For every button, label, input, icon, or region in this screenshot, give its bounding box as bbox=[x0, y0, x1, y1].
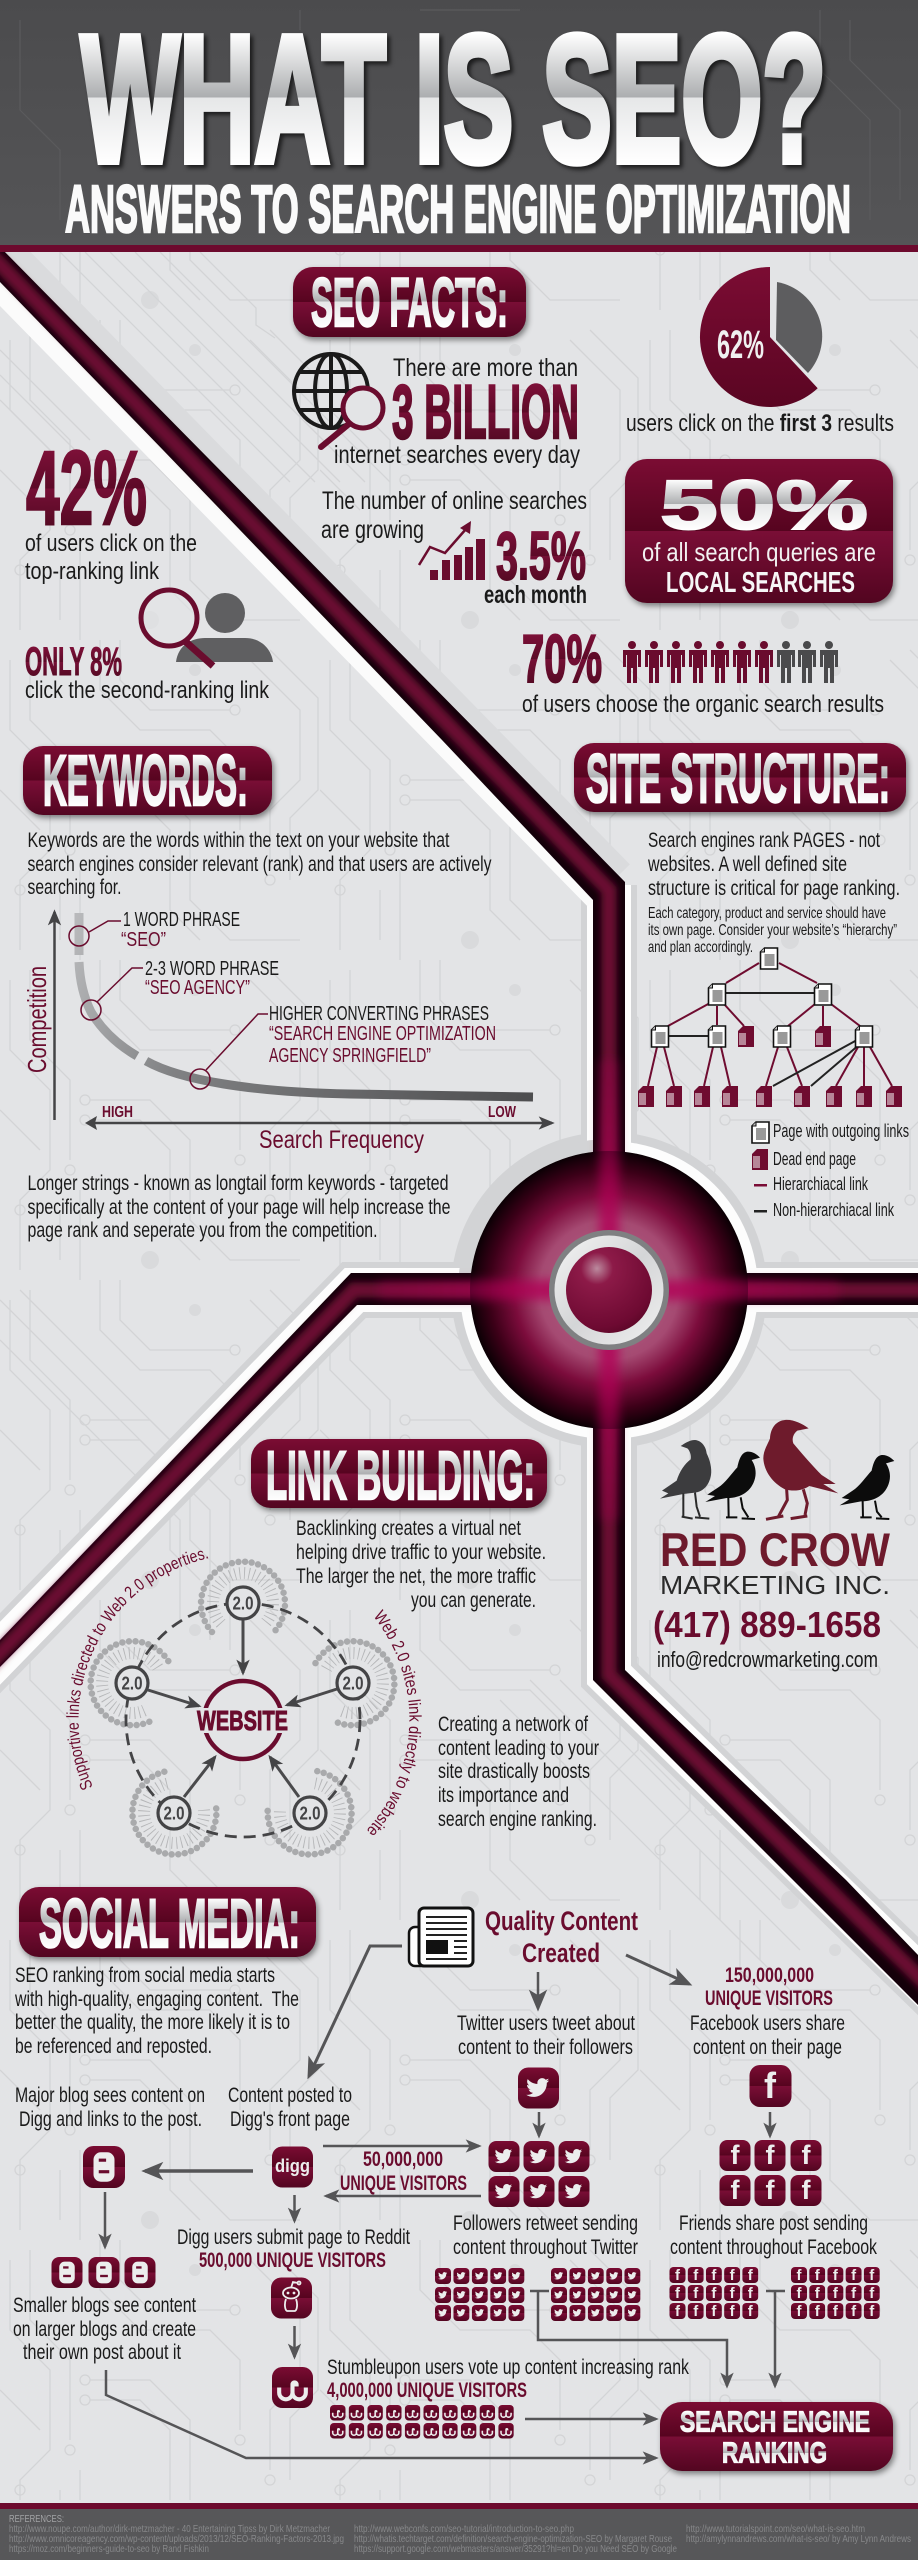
stat: searches growing 3.5%: The number of online searches bbox=[322, 487, 587, 515]
stat: only 8% bbox=[25, 640, 270, 704]
text: site structure intro: and plan accordingly. bbox=[648, 939, 753, 956]
facebook branch text bbox=[690, 1964, 845, 2059]
panel: keywords bbox=[22, 742, 552, 1242]
ribbon shapes bbox=[0, 247, 918, 2005]
stat: only 8%: ONLY 8% bbox=[25, 640, 122, 684]
callout: search engine ranking: RANKING bbox=[722, 2438, 827, 2470]
callout: 50% local searches: of all search queries are bbox=[642, 537, 876, 567]
text: network explanation: its importance and bbox=[438, 1784, 569, 1807]
text: keywords definition: search engines consider relevant (rank) and that users are actively bbox=[28, 853, 492, 876]
facebook branch text: content on their page bbox=[693, 2036, 842, 2059]
icon: facebook large: f bbox=[764, 2065, 777, 2106]
text: major blog: Major blog sees content on bbox=[15, 2084, 205, 2107]
footer: references: http://www.noupe.com/author/dirk-metzmacher - 40 Entertaining Tipss by Dirk Metzmacher bbox=[9, 2523, 330, 2535]
text: keywords definition bbox=[28, 829, 492, 899]
icon: growth bars bbox=[419, 521, 485, 580]
chart: keyword competition curve: “SEARCH ENGINE OPTIMIZATION bbox=[269, 1023, 496, 1045]
chart: keyword competition curve: “SEO AGENCY” bbox=[145, 977, 250, 999]
facebook branch text: 150,000,000 bbox=[725, 1964, 814, 1987]
diagram: web 2.0 link network: 2.0 bbox=[232, 1594, 254, 1614]
stat: 3 billion searches: internet searches every day bbox=[334, 441, 580, 469]
heading: quality content created: Created bbox=[522, 1938, 600, 1968]
text: social intro: SEO ranking from social media starts bbox=[15, 1964, 275, 1987]
panel: social media bbox=[13, 1885, 893, 2471]
chart: keyword competition curve: HIGHER CONVERTING PHRASES bbox=[269, 1003, 489, 1025]
text: major blog: Digg and links to the post. bbox=[19, 2108, 202, 2131]
chart: keyword competition curve bbox=[22, 909, 552, 1154]
panel: site structure bbox=[574, 740, 909, 1220]
text: backlinking: you can generate. bbox=[411, 1589, 536, 1612]
heading: link building: LINK BUILDING: bbox=[266, 1437, 535, 1514]
text: site structure intro: websites. A well defined site bbox=[647, 853, 847, 876]
diagram: web 2.0 link network bbox=[66, 1550, 422, 1858]
chart: keyword competition curve: Competition bbox=[22, 966, 52, 1073]
text: followers retweet bbox=[453, 2212, 638, 2259]
heading: social media: SOCIAL MEDIA: bbox=[39, 1885, 300, 1962]
text: smaller blogs: on larger blogs and create bbox=[13, 2318, 196, 2341]
chart: keyword competition curve: “SEO” bbox=[121, 929, 166, 951]
text: digg to reddit: 500,000 UNIQUE VISITORS bbox=[199, 2249, 386, 2272]
icon: stumbleupon bbox=[272, 2367, 313, 2408]
text: longtail keywords: specifically at the content of your page will help increase the bbox=[28, 1196, 450, 1219]
icon: newspaper bbox=[409, 1908, 473, 1966]
text: backlinking: The larger the net, the more traffic bbox=[296, 1565, 536, 1588]
footer: references: http://whatis.techtarget.com/definition/search-engine-optimization-SEO by Margaret Rouse bbox=[354, 2533, 672, 2545]
icon: digg: digg bbox=[275, 2156, 310, 2176]
icons: twitter grid bbox=[435, 2268, 640, 2321]
icons: stumbleupon grid bbox=[330, 2405, 514, 2438]
stat: 50 million visitors: 50,000,000 bbox=[363, 2148, 443, 2171]
icons: facebook six: fff bbox=[730, 2175, 812, 2205]
diagram: web 2.0 link network: WEBSITE bbox=[197, 1705, 288, 1736]
facebook branch text: UNIQUE VISITORS bbox=[705, 1987, 833, 2010]
heading: link building bbox=[251, 1437, 547, 1514]
text: smaller blogs bbox=[13, 2294, 196, 2364]
stat: 3 billion searches bbox=[334, 354, 580, 469]
stat: searches growing 3.5%: are growing bbox=[321, 516, 424, 544]
header band bbox=[0, 0, 918, 252]
panel: SEO facts bbox=[25, 264, 894, 718]
label: web 2.0 sites: Web 2.0 sites link directly to website bbox=[368, 1609, 422, 1835]
text: digg to reddit: Digg users submit page to Reddit bbox=[177, 2226, 410, 2249]
diagram: page hierarchy tree bbox=[638, 948, 902, 1107]
stat: 42% top link: 42% bbox=[26, 430, 147, 547]
stat: 3 billion searches: 3 BILLION bbox=[392, 370, 579, 455]
text: stumbleupon: Stumbleupon users vote up content increasing rank bbox=[327, 2356, 689, 2379]
heading: keywords: KEYWORDS: bbox=[43, 742, 248, 821]
diagram: web 2.0 link network: 2.0 bbox=[122, 1674, 142, 1694]
text: friends share bbox=[670, 2212, 877, 2259]
phone number: (417) 889-1658 bbox=[653, 1604, 881, 1645]
heading: SEO facts: SEO FACTS: bbox=[311, 264, 508, 341]
text: digg front page bbox=[228, 2084, 352, 2131]
chart: keyword competition curve: Search Frequency bbox=[259, 1126, 424, 1154]
text: smaller blogs: Smaller blogs see content bbox=[13, 2294, 196, 2317]
text: stumbleupon: 4,000,000 UNIQUE VISITORS bbox=[327, 2379, 527, 2402]
text: network explanation: site drastically boosts bbox=[438, 1760, 590, 1783]
footer: references: https://moz.com/beginners-guide-to-seo by Rand Fishkin bbox=[9, 2543, 209, 2555]
icon: facebook large bbox=[750, 2065, 792, 2107]
text: followers retweet: content throughout Twitter bbox=[453, 2236, 638, 2259]
text: digg to reddit bbox=[177, 2226, 410, 2272]
twitter branch text: content to their followers bbox=[458, 2036, 633, 2059]
icons: twitter six bbox=[488, 2141, 590, 2207]
stat: 70% organic bbox=[522, 621, 884, 718]
chart: keyword competition curve: 1 WORD PHRASE bbox=[123, 909, 240, 931]
text: major blog bbox=[15, 2084, 205, 2131]
heading: SEO facts bbox=[293, 264, 526, 341]
icon: blogger bbox=[83, 2146, 125, 2188]
text: social intro bbox=[14, 1964, 299, 2058]
footer: references: http://www.webconfs.com/seo-tutorial/introduction-to-seo.php bbox=[354, 2523, 574, 2535]
diagram: web 2.0 link network: 2.0 bbox=[164, 1804, 184, 1824]
chart: keyword competition curve: LOW bbox=[488, 1104, 517, 1121]
text: keywords definition: Keywords are the words within the text on your website that bbox=[28, 829, 450, 852]
heading: quality content created: Quality Content bbox=[485, 1906, 638, 1936]
pie chart 62%: 62% bbox=[717, 323, 764, 367]
heading: keywords bbox=[23, 742, 272, 821]
icons: facebook grid: ffffffffff bbox=[675, 2267, 875, 2284]
text: backlinking: Backlinking creates a virtual net bbox=[296, 1517, 521, 1540]
chart: keyword competition curve: 2-3 WORD PHRASE bbox=[145, 958, 279, 980]
chart: keyword competition curve: AGENCY SPRINGFIELD” bbox=[269, 1045, 431, 1067]
icon: digg bbox=[272, 2146, 313, 2188]
text: social intro: with high-quality, engaging content. The bbox=[14, 1988, 299, 2011]
text: stumbleupon bbox=[327, 2356, 689, 2402]
diagram: web 2.0 link network: 2.0 bbox=[300, 1804, 320, 1824]
pie chart 62% bbox=[700, 267, 822, 407]
text: keywords definition: searching for. bbox=[28, 876, 122, 899]
stat: searches growing 3.5%: each month bbox=[484, 581, 587, 609]
heading: quality content created bbox=[485, 1906, 638, 1968]
text: digg front page: Digg's front page bbox=[230, 2108, 350, 2131]
stat: 50 million visitors bbox=[340, 2148, 467, 2195]
icons: facebook six: fff bbox=[730, 2140, 812, 2170]
icons: facebook grid bbox=[670, 2267, 880, 2320]
stat: searches growing 3.5% bbox=[321, 487, 587, 609]
text: smaller blogs: their own post about it bbox=[23, 2341, 181, 2364]
icons: facebook grid: ffffffffff bbox=[675, 2303, 875, 2320]
logo text: RED CROW bbox=[660, 1523, 891, 1576]
icons: facebook six bbox=[720, 2140, 822, 2206]
panel: Red Crow Marketing: MARKETING INC. bbox=[660, 1570, 890, 1600]
callout: 50% local searches: 50% bbox=[660, 466, 868, 544]
footer: references bbox=[0, 2503, 918, 2560]
stat: 70% organic: 70% bbox=[522, 621, 602, 697]
logo: four crows bbox=[660, 1420, 894, 1519]
label: supportive links: Supportive links directed to Web 2.0 properties. bbox=[66, 1550, 208, 1790]
text: longtail keywords bbox=[28, 1172, 450, 1242]
legend: page types: Dead end page bbox=[773, 1149, 856, 1169]
callout: search engine ranking bbox=[660, 2402, 893, 2471]
footer: references: http://www.omnicoreagency.com/wp-content/uploads/2013/12/SEO-Ranking-Factors-2013.jpg bbox=[9, 2533, 344, 2545]
callout: 50% local searches bbox=[625, 459, 893, 603]
stat: 50 million visitors: UNIQUE VISITORS bbox=[340, 2172, 467, 2195]
flow arrows bbox=[105, 1946, 785, 2458]
icon: reddit bbox=[271, 2278, 312, 2318]
text: site structure intro bbox=[647, 829, 900, 956]
icon row: people 7 of 10 bbox=[623, 641, 838, 683]
text: backlinking: helping drive traffic to your website. bbox=[296, 1541, 546, 1564]
stat: 3 billion searches: There are more than bbox=[393, 354, 578, 382]
panel: Red Crow Marketing bbox=[653, 1420, 894, 1672]
text: network explanation: search engine ranking. bbox=[438, 1808, 597, 1831]
central hub bbox=[379, 1060, 839, 1520]
text: network explanation: content leading to your bbox=[438, 1737, 599, 1760]
icons: blogger three bbox=[52, 2257, 156, 2288]
stat: only 8%: click the second-ranking link bbox=[25, 677, 270, 704]
text: network explanation: Creating a network of bbox=[438, 1713, 588, 1736]
text: backlinking bbox=[296, 1517, 546, 1612]
text: network explanation bbox=[438, 1713, 599, 1831]
callout: search engine ranking: SEARCH ENGINE bbox=[680, 2406, 870, 2438]
footer: references: https://support.google.com/webmasters/answer/35291?hl=en Do you Need SEO by Google bbox=[354, 2543, 677, 2555]
legend: page types: Hierarchiacal link bbox=[773, 1174, 869, 1194]
text: social intro: better the quality, the more likely it is to bbox=[15, 2011, 290, 2034]
icons: facebook grid: ffffffffff bbox=[675, 2285, 875, 2302]
footer: references: REFERENCES: bbox=[9, 2513, 64, 2525]
stat: first 3 results: users click on the first 3 results bbox=[626, 410, 894, 437]
icon: twitter large bbox=[518, 2068, 559, 2108]
text: digg front page: Content posted to bbox=[228, 2084, 352, 2107]
facebook branch text: Facebook users share bbox=[690, 2012, 845, 2035]
text: followers retweet: Followers retweet sending bbox=[453, 2212, 638, 2235]
icon: globe and magnifier bbox=[294, 354, 383, 447]
legend: page types bbox=[752, 1121, 909, 1220]
diagonal ribbons and central hub bbox=[0, 224, 918, 2017]
stat: searches growing 3.5%: 3.5% bbox=[496, 518, 586, 594]
text: longtail keywords: page rank and seperate you from the competition. bbox=[28, 1219, 378, 1242]
chart: keyword competition curve: HIGH bbox=[102, 1104, 133, 1121]
heading: social media bbox=[19, 1885, 316, 1962]
stat: 42% top link: top-ranking link bbox=[25, 558, 160, 585]
twitter branch text bbox=[457, 2012, 635, 2059]
diagram: web 2.0 link network: 2.0 bbox=[342, 1674, 364, 1694]
text: social intro: be referenced and reposted. bbox=[15, 2035, 212, 2058]
stat: 42% top link: of users click on the bbox=[25, 530, 197, 557]
panel: link building bbox=[66, 1437, 599, 1858]
text: longtail keywords: Longer strings - known as longtail form keywords - targeted bbox=[28, 1172, 448, 1195]
twitter branch text: Twitter users tweet about bbox=[457, 2012, 635, 2035]
icon: magnifier and person bbox=[141, 590, 273, 666]
footer: references: http://www.tutorialspoint.com/seo/what-is-seo.htm bbox=[686, 2523, 865, 2535]
stat: 42% top link bbox=[25, 430, 197, 585]
